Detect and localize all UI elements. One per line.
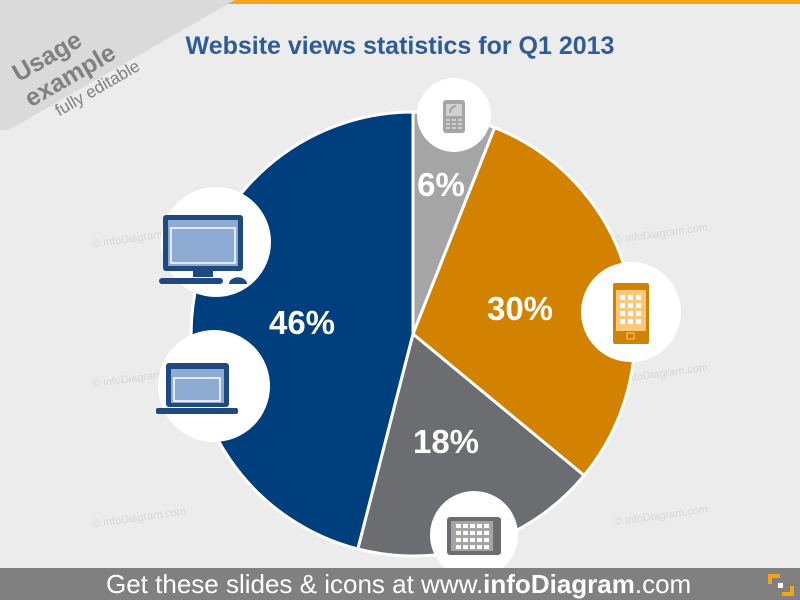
- footer: [0, 568, 800, 600]
- slice 18%: [358, 334, 584, 556]
- icon: mobile phone: [417, 78, 491, 152]
- icon: smartphone: [581, 262, 681, 362]
- watermarks: © infoDiagram.com: [92, 505, 187, 531]
- watermarks: © infoDiagram.com: [614, 361, 709, 387]
- top orange strip: [0, 0, 800, 4]
- slice 30%: [413, 128, 635, 475]
- labels: [269, 166, 553, 460]
- labels: 46%: [269, 304, 335, 341]
- corner banner: usage example: [0, 0, 235, 130]
- labels: 30%: [487, 290, 553, 327]
- watermarks: © infoDiagram.com: [92, 225, 187, 251]
- icon: tablet: [430, 491, 518, 579]
- icon: laptop: [156, 330, 270, 442]
- slice 46%: [191, 112, 413, 549]
- title: Website views statistics for Q1 2013: [186, 32, 614, 60]
- corner banner: usage example: Usage: [8, 26, 87, 88]
- corner banner: usage example: example: [20, 38, 121, 113]
- labels: 18%: [413, 423, 479, 460]
- watermarks: © infoDiagram.com: [614, 503, 709, 529]
- watermarks: © infoDiagram.com: [92, 365, 187, 391]
- icon: logo: [768, 574, 794, 596]
- labels: 6%: [417, 166, 465, 203]
- footer text: Get these slides & icons at www.infoDiagram.com: [106, 569, 691, 599]
- slice 6%: [413, 112, 495, 334]
- corner banner: usage example: fully editable: [52, 56, 143, 120]
- watermarks: © infoDiagram.com: [614, 221, 709, 247]
- icon: desktop: [159, 187, 271, 297]
